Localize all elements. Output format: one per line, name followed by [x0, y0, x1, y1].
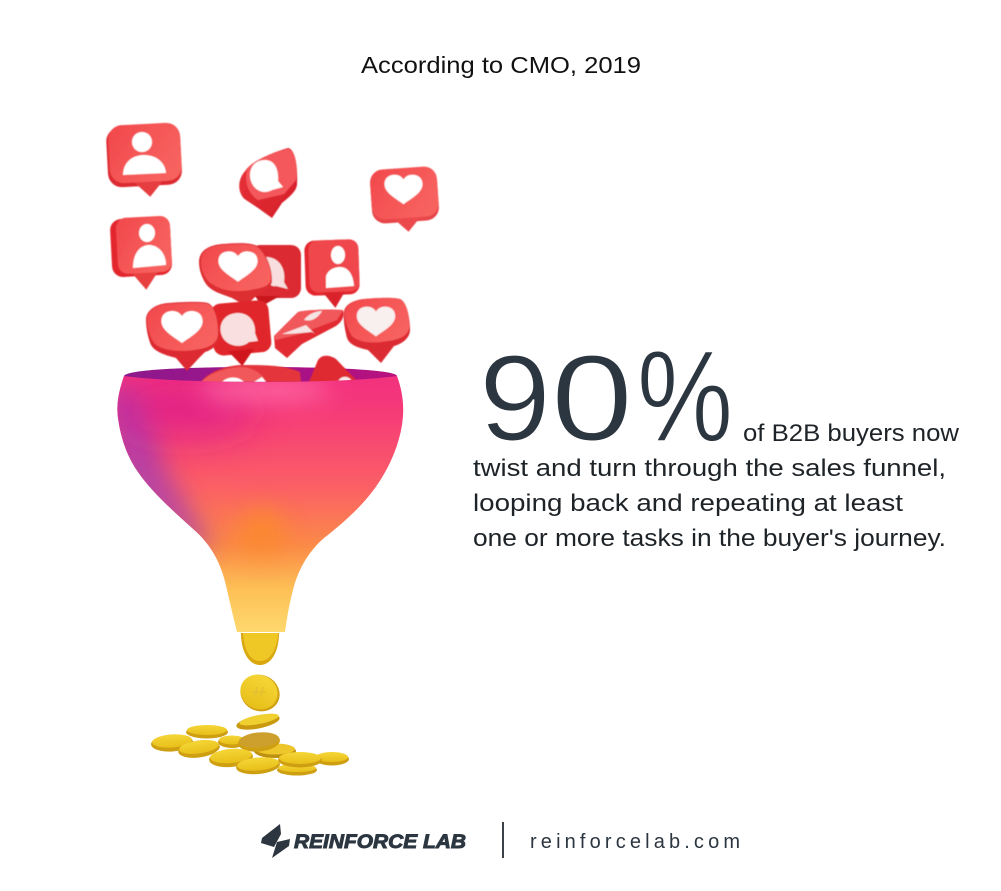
- funnel rim interior: [124, 367, 397, 384]
- bubble: person top left: [105, 122, 183, 199]
- icon: logo mark: [261, 824, 290, 858]
- main statistic: 9: [479, 330, 551, 466]
- funnel body: [117, 376, 404, 632]
- statistic description: one or more tasks in the buyer's journey.: [473, 525, 946, 552]
- footer divider: [502, 822, 504, 858]
- purple left edge: [105, 385, 215, 550]
- bubble: chat behind: [250, 245, 301, 306]
- bubbles group: [105, 122, 440, 382]
- bubble: person left: [110, 215, 173, 292]
- statistic description: [473, 420, 960, 552]
- statistic description: looping back and repeating at least: [473, 490, 903, 517]
- bubble: heart lower left: [146, 302, 219, 371]
- orange centre glow: [238, 508, 286, 556]
- bubble: heart top right: [369, 166, 440, 234]
- bubble: chat dark: [210, 299, 273, 368]
- falling coin under neck: [241, 633, 279, 665]
- footer logo: [261, 824, 466, 858]
- flat falling coin: [235, 711, 281, 733]
- main statistic: [479, 323, 733, 469]
- website address: reinforcelab.com: [530, 831, 740, 853]
- infographic canvas: [106, 56, 959, 858]
- main statistic: 0: [551, 330, 633, 466]
- magenta upper left band: [115, 384, 255, 436]
- statistic description: of B2B buyers now: [743, 420, 960, 447]
- bubbles sinking into funnel: [201, 356, 358, 382]
- bubble: squashed chat: [274, 310, 344, 358]
- main statistic: %: [637, 323, 733, 469]
- logo wordmark: REINFORCE LAB: [294, 832, 466, 853]
- coin pile: [150, 725, 349, 776]
- coins: [150, 633, 349, 776]
- pink highlight: [199, 380, 331, 400]
- tumbling coin: [234, 668, 286, 718]
- bubble: heart centre: [199, 243, 272, 306]
- bubble: heart lower right: [344, 298, 410, 363]
- infographic page: [106, 56, 959, 858]
- statistic description: twist and turn through the sales funnel,: [473, 455, 946, 482]
- bubble: person right: [304, 239, 360, 309]
- bubble: chat top centre: [239, 148, 297, 218]
- source line: According to CMO, 2019: [361, 52, 641, 78]
